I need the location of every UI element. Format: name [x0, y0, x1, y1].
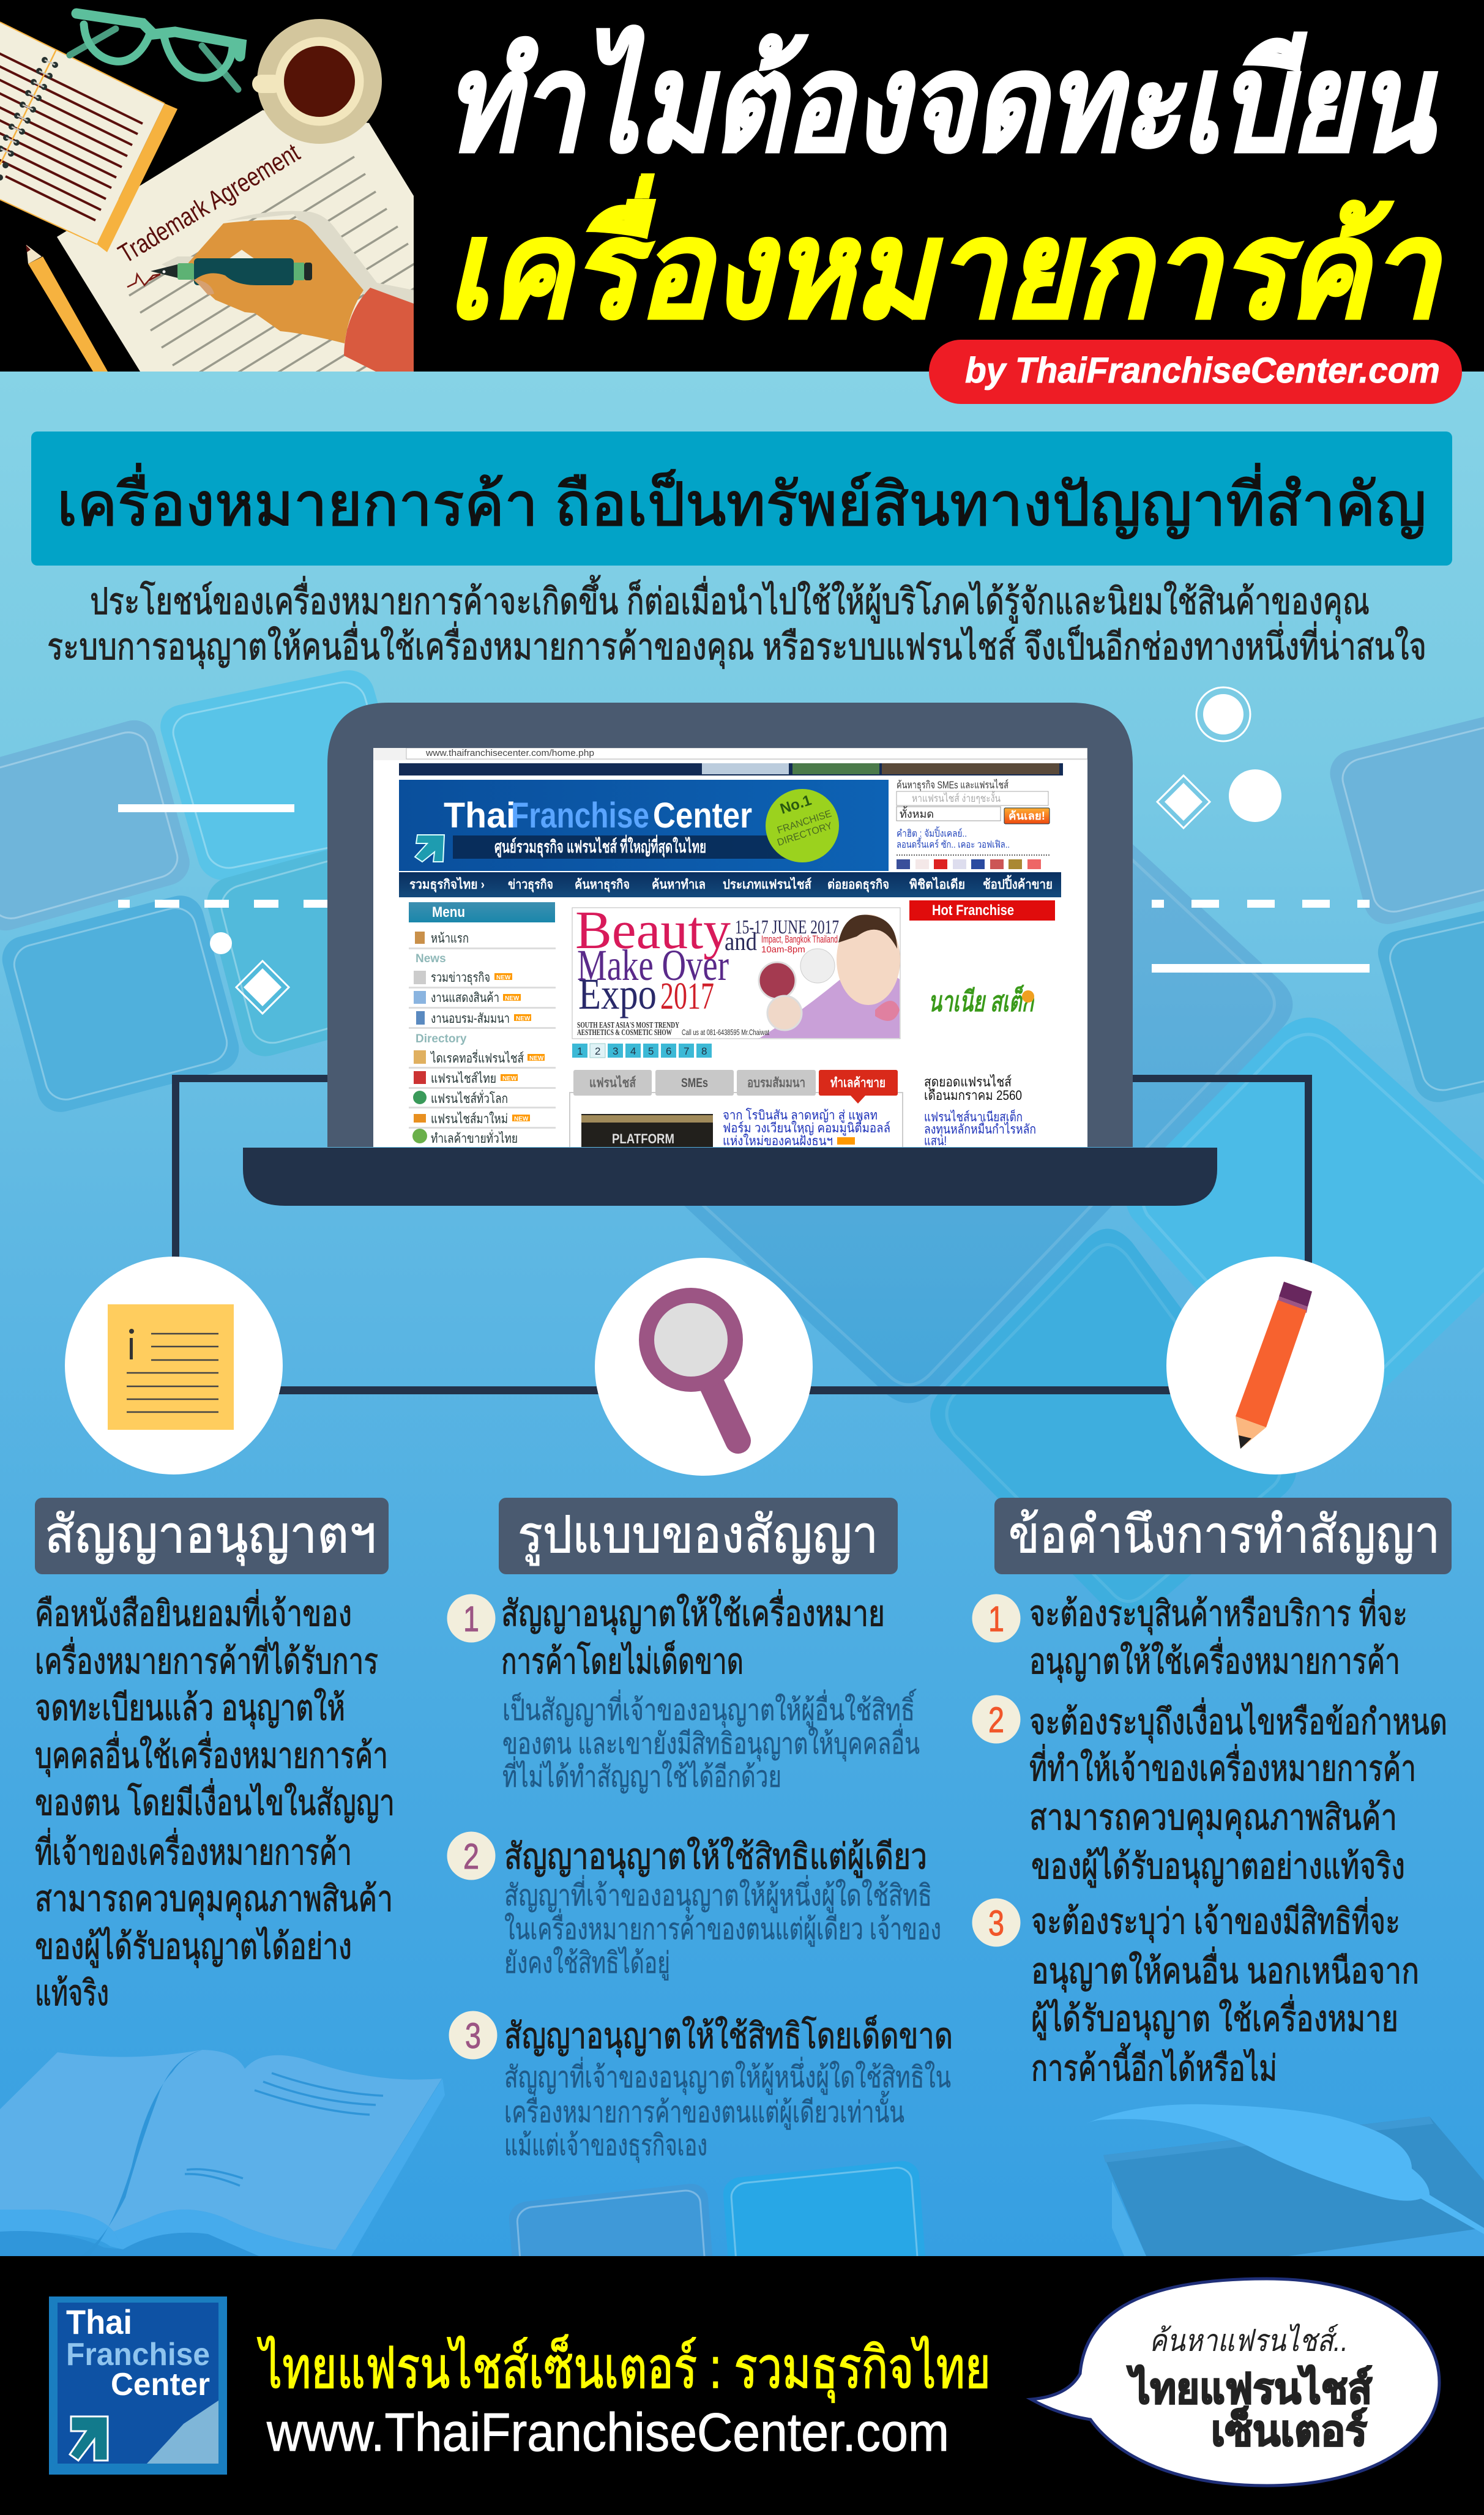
- left column text: เครื่องหมายการค้าที่ได้รับการ: [35, 1637, 378, 1681]
- icon: coffee cup: [252, 19, 382, 144]
- consideration 3: [972, 1897, 1419, 2088]
- site side menu: รวมข่าวธุรกิจ: [431, 971, 490, 985]
- section heading: contract types: รูปแบบของสัญญา: [518, 1506, 878, 1566]
- site side menu: ทำเลค้าขายทั่วไทย: [431, 1129, 518, 1146]
- site hot franchise column: นาเนีย สเต็ก: [928, 984, 1035, 1017]
- icon: contract paper: [57, 110, 414, 372]
- site tabs: ทำเลค้าขาย: [830, 1075, 886, 1090]
- site banner: Franchise: [511, 796, 649, 835]
- site hot franchise column: [909, 900, 1055, 1148]
- contract type 3: [449, 2011, 953, 2163]
- footer url: www.ThaiFranchiseCenter.com: [266, 2402, 949, 2462]
- site search box: ค้นหาธุรกิจ SMEs และแฟรนไชส์: [897, 779, 1009, 791]
- site banner: ศูนย์รวมธุรกิจ แฟรนไชส์ ที่ใหญ่ที่สุดในไทย: [494, 834, 706, 858]
- intro paragraph: [47, 575, 1426, 669]
- icon: glasses: [70, 13, 241, 89]
- section heading: license: สัญญาอนุญาตฯ: [45, 1506, 376, 1566]
- consideration 2: [972, 1695, 1447, 1888]
- left column text: [35, 1589, 395, 2013]
- site search box: ทั้งหมด: [900, 806, 934, 820]
- icon: pencil: [26, 245, 108, 372]
- site side menu: NEW: [496, 974, 511, 981]
- contract type 1: [447, 1589, 920, 1793]
- contract type 3: 3: [465, 2016, 481, 2056]
- contract type 2: สัญญาอนุญาตให้ใช้สิทธิแต่ผู้เดียว: [504, 1836, 927, 1878]
- site side menu: งานอบรม-สัมมนา: [431, 1012, 510, 1026]
- site banner: DIRECTORY: [776, 821, 834, 848]
- byline pill: by ThaiFranchiseCenter.com: [965, 351, 1440, 391]
- laptop with website screenshot: [243, 703, 1217, 1206]
- icon: feather and closed book watermark: [1087, 2104, 1484, 2256]
- speech bubble: ไทยแฟรนไชส์: [1127, 2364, 1372, 2412]
- site banner: Thai: [444, 796, 516, 835]
- contract type 3: สัญญาที่เจ้าของอนุญาตให้ผู้หนึ่งผู้ใดใช้สิทธิใน: [504, 2057, 951, 2095]
- site side menu: งานแสดงสินค้า: [431, 991, 499, 1005]
- footer logo: [49, 2296, 227, 2475]
- icon: hand holding pen: [151, 220, 414, 372]
- site hot franchise column: ลงทุนหลักหมื่นกำไรหลัก: [924, 1120, 1036, 1137]
- icon: open book watermark: [0, 2050, 445, 2256]
- section heading: contract types: [499, 1498, 898, 1574]
- site hot franchise column: แฟรนไชส์นาเนียสเต็ก: [924, 1108, 1023, 1124]
- site side menu: NEW: [502, 1075, 517, 1082]
- site search box: ค้นเลย!: [1009, 810, 1045, 822]
- site hot franchise column: เดือนมกราคม 2560: [924, 1088, 1022, 1103]
- footer logo: Center: [111, 2367, 210, 2402]
- contract type 2: 2: [463, 1837, 479, 1877]
- footer logo: Thai: [66, 2303, 132, 2341]
- site side menu: แฟรนไชส์ไทย: [431, 1071, 496, 1086]
- site navigation bar: ค้นหาทำเล: [652, 877, 706, 892]
- consideration 1: [972, 1589, 1408, 1683]
- site event ad: Call us at 081-6438595 Mr.Chaiwat: [682, 1028, 769, 1037]
- site pager: 1: [577, 1045, 583, 1057]
- site side menu: แฟรนไชส์มาใหม่: [431, 1112, 508, 1126]
- page background gradient: [0, 372, 1484, 2256]
- decorative shapes left: [118, 804, 328, 1014]
- contract type 1: สัญญาอนุญาตให้ใช้เครื่องหมาย: [501, 1589, 885, 1635]
- site navigation bar: ข่าวธุรกิจ: [508, 878, 553, 893]
- site hot franchise column: แสน!: [924, 1134, 947, 1148]
- site featured story: จาก โรบินสัน ลาดหญ้า สู่ แพลท: [723, 1108, 878, 1123]
- contract type 3: สัญญาอนุญาตให้ใช้สิทธิโดยเด็ดขาด: [504, 2015, 953, 2058]
- site tabs: แฟรนไชส์: [589, 1075, 636, 1090]
- icon circle: magnifier: [595, 1258, 813, 1476]
- contract type 1: ของตน และเขายังมีสิทธิอนุญาตให้บุคคลอื่น: [502, 1723, 920, 1762]
- contract type 2: ในเครื่องหมายการค้าของตนแต่ผู้เดียว เจ้าของ: [504, 1908, 941, 1947]
- site side menu: NEW: [529, 1055, 544, 1062]
- left column text: สามารถควบคุมคุณภาพสินค้า: [35, 1879, 393, 1921]
- site banner: FRANCHISE: [776, 809, 833, 836]
- contract type 3: แม้แต่เจ้าของธุรกิจเอง: [504, 2129, 707, 2163]
- header illustration: desk with contract: [0, 9, 414, 372]
- site search box: ลอนดรี้นเคร์ ซัก.. เคอะ วอฟเฟิล..: [897, 837, 1010, 850]
- site banner: Center: [653, 796, 752, 835]
- site side menu: ไดเรคทอรี่แฟรนไชส์: [430, 1049, 524, 1066]
- site pager: 4: [630, 1045, 636, 1057]
- site navigation bar: [399, 872, 1061, 897]
- section heading: considerations: [994, 1498, 1452, 1574]
- site navigation bar: ประเภทแฟรนไชส์: [723, 876, 811, 892]
- site side menu: Directory: [416, 1033, 467, 1045]
- site featured story: ฟอร์ม วงเวียนใหญ่ คอมมูนิตี้มอลล์: [723, 1119, 890, 1136]
- site event ad: SOUTH EAST ASIA'S MOST TRENDY: [577, 1021, 679, 1030]
- site tabs: [570, 1070, 903, 1151]
- consideration 2: 2: [988, 1700, 1004, 1740]
- site navigation bar: รวมธุรกิจไทย ›: [409, 876, 485, 893]
- website screenshot: www.thaifranchisecenter.com/home.php: [425, 748, 594, 758]
- icon circle: pencil: [1166, 1257, 1384, 1474]
- left column text: คือหนังสือยินยอมที่เจ้าของ: [35, 1589, 352, 1634]
- left column text: แท้จริง: [35, 1973, 109, 2013]
- site navigation bar: พิชิตไอเดีย: [909, 876, 965, 892]
- left column text: จดทะเบียนแล้ว อนุญาตให้: [35, 1687, 345, 1730]
- site search box: [897, 779, 1050, 869]
- header black band: [0, 0, 1484, 372]
- site banner: No.1: [778, 792, 813, 818]
- left column text: บุคคลอื่นใช้เครื่องหมายการค้า: [35, 1731, 388, 1777]
- footer yellow tagline: ไทยแฟรนไชส์เซ็นเตอร์ : รวมธุรกิจไทย: [257, 2334, 991, 2403]
- site event ad: AESTHETICS & COSMETIC SHOW: [577, 1028, 672, 1037]
- site featured story: แห่งใหม่ของคนฝั่งธนฯ: [723, 1132, 833, 1148]
- site event ad: 15-17 JUNE 2017: [735, 916, 839, 938]
- speech bubble: ค้นหาแฟรนไชส์..: [1149, 2323, 1348, 2358]
- banner: key statement: เครื่องหมายการค้า ถือเป็นทรัพย์สินทางปัญญาที่สำคัญ: [57, 463, 1426, 539]
- site side menu: NEW: [516, 1015, 531, 1022]
- site event ad: and: [725, 928, 757, 956]
- laptop base: [243, 1148, 1217, 1206]
- contract type 2: ยังคงใช้สิทธิได้อยู่: [504, 1946, 670, 1981]
- speech bubble: [1031, 2279, 1439, 2486]
- footer logo: Franchise: [66, 2337, 210, 2372]
- site side menu: แฟรนไชส์ทั่วโลก: [431, 1089, 508, 1106]
- site banner: [399, 780, 889, 871]
- site search box: คำฮิต : จัมปิ้งเคลย์..: [897, 826, 967, 839]
- site pager: 7: [684, 1045, 689, 1057]
- site side menu: NEW: [514, 1116, 529, 1123]
- site pager: 6: [666, 1045, 671, 1057]
- site navigation bar: ค้นหาธุรกิจ: [575, 877, 630, 893]
- contract type 3: เครื่องหมายการค้าของตนแต่ผู้เดียวเท่านั้น: [504, 2091, 904, 2130]
- contract type 2: สัญญาที่เจ้าของอนุญาตให้ผู้หนึ่งผู้ใดใช้สิทธิ: [504, 1875, 932, 1913]
- site hot franchise column: Hot Franchise: [932, 902, 1014, 919]
- icon circle: note: [65, 1257, 283, 1474]
- site tabs: SMEs: [681, 1076, 708, 1090]
- consideration 2: สามารถควบคุมคุณภาพสินค้า: [1029, 1798, 1397, 1839]
- site navigation bar: ช้อปปิ้งค้าขาย: [983, 875, 1053, 892]
- site pager: [572, 1044, 712, 1058]
- contract type 1: การค้าโดยไม่เด็ดขาด: [501, 1640, 744, 1681]
- site featured story: PLATFORM: [612, 1131, 674, 1146]
- site search box: หาแฟรนไชส์ ง่ายๆชะงั้น: [912, 791, 1001, 804]
- footer band: [0, 2256, 1484, 2515]
- site pager: 5: [648, 1045, 654, 1057]
- icon: notebook: [0, 22, 177, 252]
- contract type 1: ที่ไม่ได้ทำสัญญาใช้ได้อีกด้วย: [502, 1756, 781, 1793]
- consideration 3: 3: [988, 1904, 1004, 1943]
- section heading: considerations: ข้อคำนึงการทำสัญญา: [1009, 1506, 1440, 1564]
- banner: key statement: [31, 432, 1452, 566]
- contract heading: Trademark Agreement: [113, 138, 305, 269]
- website screenshot: [373, 748, 1087, 1151]
- decorative shapes right: [1152, 687, 1370, 973]
- site event ad: Impact, Bangkok Thailand: [761, 933, 838, 945]
- consideration 3: การค้านี้อีกได้หรือไม่: [1031, 2043, 1277, 2088]
- signature scribble: [127, 274, 160, 287]
- left column text: ที่เจ้าของเครื่องหมายการค้า: [35, 1828, 352, 1872]
- site event ad: 10am-8pm: [761, 944, 805, 955]
- site pager: 8: [701, 1045, 707, 1057]
- site pager: 2: [595, 1045, 600, 1057]
- left column text: ของผู้ได้รับอนุญาตได้อย่าง: [35, 1926, 352, 1968]
- site featured story: [581, 1108, 890, 1151]
- consideration 3: ผู้ได้รับอนุญาต ใช้เครื่องหมาย: [1031, 1994, 1398, 2041]
- contract type 2: [447, 1831, 941, 1981]
- site side menu: หน้าแรก: [431, 932, 469, 946]
- site event ad: Make Over: [577, 941, 729, 990]
- site pager: 3: [613, 1045, 618, 1057]
- speech bubble: เซ็นเตอร์: [1211, 2406, 1367, 2454]
- left column text: ของตน โดยมีเงื่อนไขในสัญญา: [35, 1778, 395, 1823]
- site hot franchise column: สุดยอดแฟรนไชส์: [924, 1074, 1012, 1090]
- site event ad: 2017: [660, 976, 714, 1017]
- site side menu: News: [416, 952, 446, 965]
- site side menu: NEW: [505, 995, 520, 1002]
- connector lines: [172, 1075, 1312, 1394]
- site side menu: [409, 902, 556, 1146]
- background tile pattern: [0, 666, 1484, 2326]
- site navigation bar: ต่อยอดธุรกิจ: [827, 878, 889, 893]
- consideration 1: 1: [988, 1599, 1004, 1639]
- laptop lid: [327, 703, 1133, 1147]
- site tabs: อบรมสัมมนา: [747, 1076, 805, 1090]
- site event ad: [572, 901, 900, 1039]
- contract type 1: เป็นสัญญาที่เจ้าของอนุญาตให้ผู้อื่นใช้สิทธิ์: [502, 1689, 917, 1728]
- contract type 1: 1: [463, 1599, 479, 1639]
- byline pill: [929, 340, 1462, 404]
- site side menu: Menu: [432, 904, 465, 921]
- site event ad: Expo: [578, 970, 657, 1018]
- site event ad: Beauty: [575, 901, 731, 960]
